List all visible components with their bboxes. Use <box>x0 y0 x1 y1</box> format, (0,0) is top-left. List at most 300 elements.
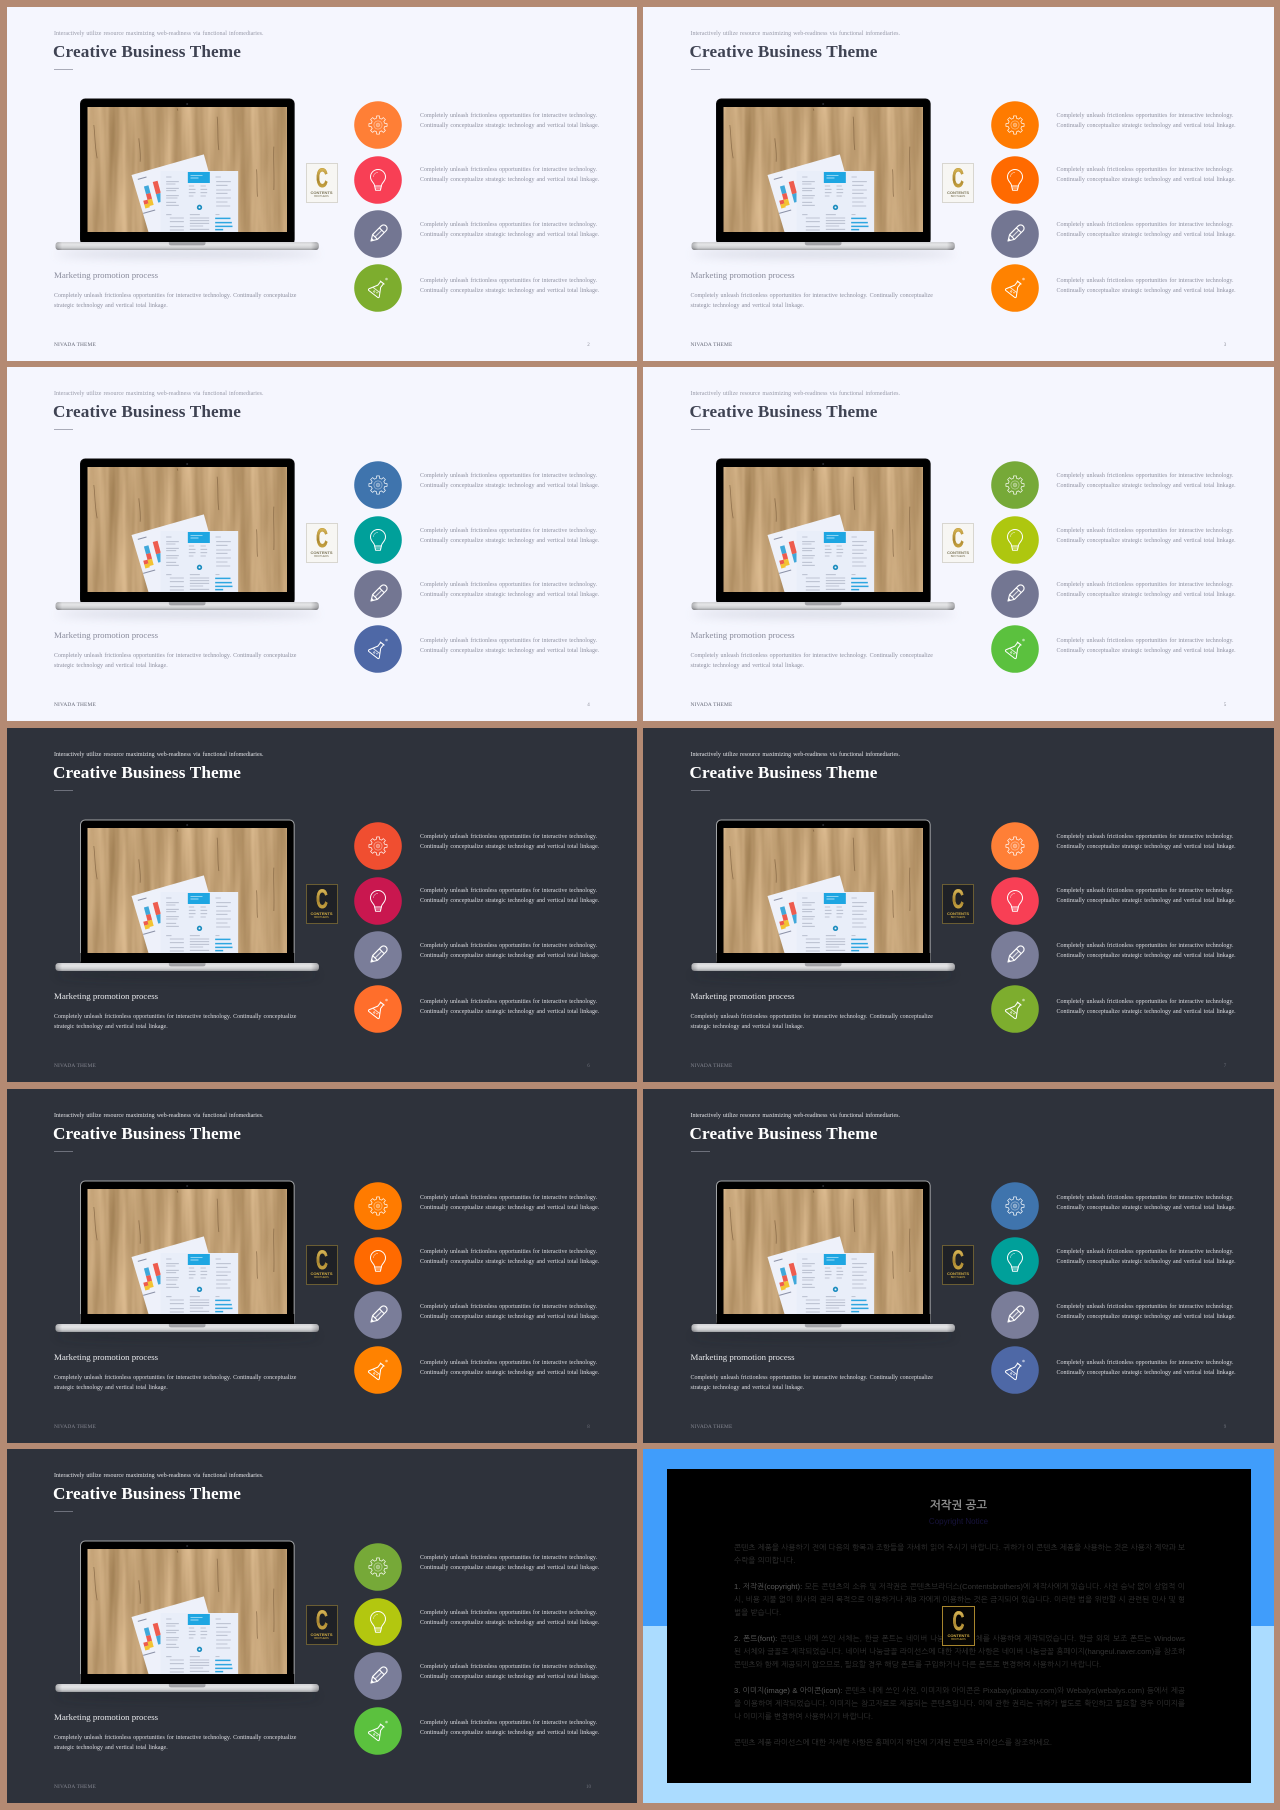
icon: pencil <box>991 210 1039 258</box>
logo: contents badge: BROTHERS <box>951 916 965 918</box>
icon: pencil <box>990 931 1038 979</box>
body text: strategic technology and vertical total linkage. <box>54 1745 168 1751</box>
icon: light bulb <box>354 1237 402 1285</box>
feature row 3 <box>354 1291 606 1339</box>
icon: flask <box>354 264 402 312</box>
feature text: Continually conceptualize strategic technology and vertical total linkage. <box>420 1730 599 1736</box>
heading: marketing promotion process: Marketing promotion process <box>690 1352 795 1362</box>
heading: marketing promotion process: Marketing promotion process <box>690 630 795 640</box>
body text: strategic technology and vertical total linkage. <box>54 1385 168 1391</box>
page number: 10 <box>586 1785 591 1790</box>
logo: contents badge: CONTENTS <box>947 1271 969 1276</box>
feature text <box>1056 1247 1236 1267</box>
page number: 2 <box>587 343 590 348</box>
feature text: Completely unleash frictionless opportunities for interactive technology. <box>420 1249 597 1255</box>
feature text <box>420 1718 599 1738</box>
logo: contents badge: BROTHERS <box>314 1276 329 1279</box>
notice subtitle: Copyright Notice <box>929 1517 988 1526</box>
feature row 2 <box>990 1237 1242 1285</box>
subtitle: Interactively utilize resource maximizing web-readiness via functional infomediaries. <box>54 31 263 37</box>
logo: contents badge <box>942 1245 974 1285</box>
feature text: Continually conceptualize strategic technology and vertical total linkage. <box>1056 953 1236 959</box>
feature text <box>420 528 599 544</box>
body text <box>54 1012 296 1032</box>
icon: flask <box>990 985 1038 1033</box>
logo: contents badge: C <box>952 163 964 193</box>
logo: contents badge: C <box>952 523 964 553</box>
title: Creative Business Theme <box>53 763 241 782</box>
feature text <box>1056 1193 1236 1213</box>
title underline <box>54 790 73 791</box>
body text <box>690 292 933 309</box>
body text <box>54 652 296 669</box>
feature text: Continually conceptualize strategic technology and vertical total linkage. <box>1056 648 1236 654</box>
logo: contents badge: CONTENTS <box>310 1632 332 1637</box>
title: Creative Business Theme <box>53 42 241 61</box>
feature text: Completely unleash frictionless opportunities for interactive technology. <box>1056 1249 1234 1255</box>
feature text: Continually conceptualize strategic technology and vertical total linkage. <box>1056 898 1236 904</box>
logo: contents badge: C <box>316 1245 327 1275</box>
logo: contents badge: C <box>316 523 327 553</box>
subtitle: Interactively utilize resource maximizing web-readiness via functional infomediaries. <box>54 391 263 397</box>
feature row 2 <box>354 1598 606 1646</box>
feature row 2 <box>990 877 1242 925</box>
feature row 1 <box>354 101 599 149</box>
feature text: Continually conceptualize strategic technology and vertical total linkage. <box>420 1370 599 1376</box>
feature text: Completely unleash frictionless opportunities for interactive technology. <box>420 1664 597 1670</box>
logo: contents badge <box>942 884 974 924</box>
icon: gear <box>990 1182 1038 1230</box>
feature text <box>1056 832 1236 852</box>
feature text <box>420 278 599 294</box>
heading: marketing promotion process: Marketing promotion process <box>54 991 158 1001</box>
feature text: Completely unleash frictionless opportunities for interactive technology. <box>1056 528 1234 534</box>
icon: pencil <box>354 931 402 979</box>
feature row 4 <box>354 625 599 673</box>
feature text <box>420 112 599 129</box>
feature text: Completely unleash frictionless opportunities for interactive technology. <box>1056 278 1234 284</box>
title: Creative Business Theme <box>690 402 878 421</box>
subtitle: Interactively utilize resource maximizing web-readiness via functional infomediaries. <box>690 31 900 37</box>
title underline <box>690 429 710 430</box>
icon: light bulb <box>354 516 402 564</box>
body text: Completely unleash frictionless opportunities for interactive technology. Continually conceptualize <box>54 293 296 299</box>
feature text <box>420 1553 599 1573</box>
title: Creative Business Theme <box>690 42 878 61</box>
feature text: Completely unleash frictionless opportunities for interactive technology. <box>1056 943 1234 949</box>
logo: contents badge: BROTHERS <box>314 194 329 198</box>
feature text <box>1056 1302 1236 1322</box>
logo: contents badge: CONTENTS <box>310 1271 332 1276</box>
feature text: Completely unleash frictionless opportunities for interactive technology. <box>420 1195 597 1201</box>
panel: dark slide 8 <box>643 1089 1274 1443</box>
feature row 1 <box>990 822 1242 870</box>
feature text: Completely unleash frictionless opportunities for interactive technology. <box>420 888 597 894</box>
feature text: Completely unleash frictionless opportunities for interactive technology. <box>420 222 597 228</box>
notice body text: 벌을 받습니다. <box>734 1608 781 1617</box>
feature text: Completely unleash frictionless opportunities for interactive technology. <box>1056 582 1234 588</box>
feature text: Continually conceptualize strategic technology and vertical total linkage. <box>1056 1009 1236 1015</box>
icon: flask <box>990 1346 1038 1394</box>
notice body text: 나 이미지를 변경하여 사용하시기 바랍니다. <box>734 1712 873 1721</box>
feature row 3 <box>990 570 1242 618</box>
page number: 9 <box>1224 1425 1226 1430</box>
feature text: Continually conceptualize strategic technology and vertical total linkage. <box>1056 483 1236 489</box>
feature text: Continually conceptualize strategic technology and vertical total linkage. <box>1056 177 1236 183</box>
feature row 1 <box>991 101 1236 149</box>
body text: strategic technology and vertical total linkage. <box>690 1024 804 1030</box>
feature text: Continually conceptualize strategic technology and vertical total linkage. <box>1056 232 1236 238</box>
feature text <box>1056 636 1236 656</box>
icon: flask <box>354 625 402 673</box>
feature text: Continually conceptualize strategic technology and vertical total linkage. <box>420 232 599 238</box>
notice body text <box>734 1541 1185 1749</box>
laptop mockup <box>46 1174 332 1354</box>
panel: light slide 3 <box>6 367 637 721</box>
logo: contents badge: C <box>316 1605 327 1635</box>
feature row 4 <box>354 1346 606 1394</box>
body text <box>54 292 296 309</box>
icon: pencil <box>990 1291 1038 1339</box>
icon: flask <box>354 1707 402 1755</box>
feature text: Continually conceptualize strategic technology and vertical total linkage. <box>420 1205 599 1211</box>
icon: light bulb <box>354 156 402 204</box>
feature row 2 <box>354 1237 606 1285</box>
feature text <box>1056 112 1236 129</box>
icon: gear <box>990 822 1038 870</box>
feature text: Completely unleash frictionless opportunities for interactive technology. <box>420 528 597 534</box>
feature row 2 <box>990 516 1242 564</box>
feature text: Completely unleash frictionless opportunities for interactive technology. <box>420 1304 597 1310</box>
icon: pencil <box>354 1291 402 1339</box>
laptop mockup <box>692 98 955 261</box>
feature text <box>420 222 599 238</box>
notice body text: 수락을 의미합니다. <box>734 1556 795 1565</box>
feature text: Continually conceptualize strategic technology and vertical total linkage. <box>420 288 599 294</box>
body text: strategic technology and vertical total linkage. <box>54 303 168 309</box>
page number: 5 <box>1224 703 1226 708</box>
feature text <box>420 941 599 961</box>
footer brand: NIVADA THEME <box>54 1063 96 1069</box>
footer brand: NIVADA THEME <box>54 1424 96 1430</box>
feature text <box>1056 471 1236 491</box>
logo: contents badge <box>306 1245 338 1285</box>
feature row 3 <box>990 931 1242 979</box>
body text: strategic technology and vertical total linkage. <box>690 663 804 669</box>
logo: contents badge <box>306 163 338 203</box>
icon: pencil <box>354 570 402 618</box>
logo: contents badge centered: CONTENTS <box>948 1633 970 1638</box>
footer brand: NIVADA THEME <box>54 1784 96 1790</box>
feature row 2 <box>354 877 606 925</box>
footer brand: NIVADA THEME <box>54 702 96 708</box>
feature text: Completely unleash frictionless opportunities for interactive technology. <box>1056 167 1234 173</box>
icon: flask <box>991 264 1039 312</box>
icon: flask <box>354 985 402 1033</box>
icon: flask <box>354 1346 402 1394</box>
feature row 1 <box>354 822 606 870</box>
feature text: Continually conceptualize strategic technology and vertical total linkage. <box>420 648 599 654</box>
laptop mockup <box>683 813 968 993</box>
feature text <box>1056 222 1236 238</box>
logo: contents badge: C <box>952 884 964 914</box>
laptop mockup <box>56 98 319 261</box>
feature text: Continually conceptualize strategic technology and vertical total linkage. <box>1056 1259 1236 1265</box>
icon: flask <box>990 625 1038 673</box>
title: Creative Business Theme <box>53 1484 241 1503</box>
icon: light bulb <box>354 877 402 925</box>
feature text: Continually conceptualize strategic technology and vertical total linkage. <box>420 123 599 129</box>
feature text: Completely unleash frictionless opportunities for interactive technology. <box>1056 1360 1234 1366</box>
subtitle: Interactively utilize resource maximizing web-readiness via functional infomediaries. <box>54 1113 263 1119</box>
feature text: Completely unleash frictionless opportunities for interactive technology. <box>420 999 597 1005</box>
feature row 3 <box>990 1291 1242 1339</box>
feature text <box>1056 166 1236 183</box>
laptop mockup <box>683 1174 968 1354</box>
logo: contents badge: BROTHERS <box>951 1276 965 1279</box>
feature text: Completely unleash frictionless opportunities for interactive technology. <box>420 834 597 840</box>
laptop mockup <box>46 813 332 993</box>
feature text <box>1056 941 1236 961</box>
feature row 4 <box>354 1707 606 1755</box>
logo: contents badge <box>306 884 338 924</box>
laptop mockup <box>56 458 319 621</box>
feature text: Continually conceptualize strategic technology and vertical total linkage. <box>420 592 599 598</box>
feature text: Continually conceptualize strategic technology and vertical total linkage. <box>1056 288 1236 294</box>
logo: contents badge: CONTENTS <box>310 550 332 555</box>
logo: contents badge: CONTENTS <box>947 910 969 916</box>
feature text: Completely unleash frictionless opportunities for interactive technology. <box>420 167 597 173</box>
panel: dark slide 6 <box>643 728 1274 1082</box>
feature text: Continually conceptualize strategic technology and vertical total linkage. <box>1056 844 1236 850</box>
feature text <box>1056 580 1236 600</box>
body text: Completely unleash frictionless opportunities for interactive technology. Continually conceptualize <box>54 1014 296 1020</box>
body text: strategic technology and vertical total linkage. <box>690 303 804 309</box>
title underline <box>54 1511 73 1512</box>
feature row 2 <box>354 156 599 204</box>
body text: strategic technology and vertical total linkage. <box>54 1024 168 1030</box>
subtitle: Interactively utilize resource maximizing web-readiness via functional infomediaries. <box>690 752 900 758</box>
logo: contents badge <box>942 523 974 563</box>
panel: dark slide 5 <box>6 728 637 1082</box>
feature text: Completely unleash frictionless opportunities for interactive technology. <box>420 582 597 588</box>
feature text: Continually conceptualize strategic technology and vertical total linkage. <box>420 1009 599 1015</box>
title: Creative Business Theme <box>690 763 878 782</box>
logo: contents badge centered: BROTHERS <box>951 1638 966 1641</box>
feature text <box>420 166 599 183</box>
logo: contents badge: CONTENTS <box>947 550 969 555</box>
feature text: Completely unleash frictionless opportunities for interactive technology. <box>1056 473 1234 479</box>
feature row 4 <box>990 625 1242 673</box>
feature row 1 <box>354 461 599 509</box>
feature text: Completely unleash frictionless opportunities for interactive technology. <box>1056 999 1234 1005</box>
icon: light bulb <box>991 156 1039 204</box>
title underline <box>690 790 710 791</box>
feature text <box>420 997 599 1017</box>
icon: gear <box>354 461 402 509</box>
feature text: Completely unleash frictionless opportunities for interactive technology. <box>420 473 597 479</box>
icon: gear <box>354 822 402 870</box>
body text: Completely unleash frictionless opportunities for interactive technology. Continually conceptualize <box>690 1014 933 1020</box>
panel: light slide 4 <box>643 367 1274 721</box>
feature text <box>420 1302 599 1322</box>
feature text: Continually conceptualize strategic technology and vertical total linkage. <box>1056 1370 1236 1376</box>
feature text: Completely unleash frictionless opportunities for interactive technology. <box>420 1720 597 1726</box>
feature row 4 <box>990 985 1242 1033</box>
footer brand: NIVADA THEME <box>690 342 732 348</box>
notice body text: 콘텐츠와 함께 제공되지 않으므로, 필요할 경우 해당 폰트를 구입하거나 다른 폰트로 변경하여 사용하시기 바랍니다. <box>734 1660 1101 1669</box>
body text <box>54 1373 296 1393</box>
footer brand: NIVADA THEME <box>690 1063 732 1069</box>
black notice card <box>666 1469 1250 1783</box>
page number: 8 <box>587 1425 590 1430</box>
feature row 1 <box>354 1543 606 1591</box>
logo: contents badge: CONTENTS <box>310 910 332 916</box>
page number: 4 <box>587 703 590 708</box>
body text: Completely unleash frictionless opportunities for interactive technology. Continually conceptualize <box>54 653 296 659</box>
logo: contents badge: BROTHERS <box>314 916 329 918</box>
title underline <box>54 69 73 70</box>
logo: contents badge <box>306 523 338 563</box>
feature text <box>1056 886 1236 906</box>
title underline <box>690 69 710 70</box>
panel: light slide 2 <box>643 7 1274 361</box>
feature text <box>420 636 599 656</box>
feature row 3 <box>354 570 599 618</box>
feature text: Completely unleash frictionless opportunities for interactive technology. <box>420 1360 597 1366</box>
logo: contents badge: BROTHERS <box>314 1637 329 1640</box>
title: Creative Business Theme <box>53 402 241 421</box>
feature row 2 <box>354 516 599 564</box>
footer brand: NIVADA THEME <box>54 342 96 348</box>
heading: marketing promotion process: Marketing promotion process <box>54 630 158 640</box>
icon: gear <box>354 1182 402 1230</box>
subtitle: Interactively utilize resource maximizing web-readiness via functional infomediaries. <box>690 391 900 397</box>
feature text <box>1056 1358 1236 1378</box>
icon: pencil <box>354 1652 402 1700</box>
feature row 1 <box>354 1182 606 1230</box>
heading: marketing promotion process: Marketing promotion process <box>54 1712 158 1722</box>
icon: gear <box>354 1543 402 1591</box>
icon: gear <box>354 101 402 149</box>
icon: light bulb <box>354 1598 402 1646</box>
feature text <box>420 1358 599 1378</box>
body text: strategic technology and vertical total linkage. <box>54 663 168 669</box>
logo: contents badge: CONTENTS <box>947 190 969 194</box>
footer brand: NIVADA THEME <box>690 1424 732 1430</box>
icon: light bulb <box>990 1237 1038 1285</box>
feature row 3 <box>991 210 1236 258</box>
feature text <box>420 1247 599 1267</box>
body text <box>54 1733 296 1753</box>
page number: 7 <box>1224 1064 1226 1069</box>
footer brand: NIVADA THEME <box>690 702 732 708</box>
heading: marketing promotion process: Marketing promotion process <box>690 991 795 1001</box>
feature text: Completely unleash frictionless opportunities for interactive technology. <box>420 943 597 949</box>
body text: Completely unleash frictionless opportunities for interactive technology. Continually conceptualize <box>690 293 933 299</box>
feature text: Continually conceptualize strategic technology and vertical total linkage. <box>1056 592 1236 598</box>
panel: dark slide 7 <box>6 1089 637 1443</box>
panel: dark slide 9 <box>6 1449 637 1803</box>
feature text: Completely unleash frictionless opportunities for interactive technology. <box>420 1610 597 1616</box>
feature text: Continually conceptualize strategic technology and vertical total linkage. <box>420 1565 599 1571</box>
icon: gear <box>990 461 1038 509</box>
feature text: Completely unleash frictionless opportunities for interactive technology. <box>420 278 597 284</box>
logo: contents badge centered <box>942 1606 975 1646</box>
icon: pencil <box>990 570 1038 618</box>
feature text: Continually conceptualize strategic technology and vertical total linkage. <box>420 1314 599 1320</box>
feature row 1 <box>990 461 1242 509</box>
feature text: Continually conceptualize strategic technology and vertical total linkage. <box>420 898 599 904</box>
icon: light bulb <box>990 516 1038 564</box>
feature text <box>420 886 599 906</box>
icon: pencil <box>354 210 402 258</box>
title: Creative Business Theme <box>690 1124 878 1143</box>
body text: Completely unleash frictionless opportunities for interactive technology. Continually conceptualize <box>54 1735 296 1741</box>
logo: contents badge <box>942 163 974 203</box>
feature text: Continually conceptualize strategic technology and vertical total linkage. <box>420 177 599 183</box>
logo: contents badge: BROTHERS <box>314 555 329 558</box>
icon: light bulb <box>990 877 1038 925</box>
feature text <box>1056 526 1236 546</box>
feature text: Continually conceptualize strategic technology and vertical total linkage. <box>420 1674 599 1680</box>
laptop mockup <box>683 452 968 632</box>
panel: copyright notice <box>643 1449 1274 1803</box>
notice body text: 콘텐츠 제품 라이선스에 대한 자세한 사항은 홈페이지 하단에 기재된 콘텐츠 라이선스를 참조하세요. <box>734 1738 1052 1747</box>
feature text <box>420 1662 599 1682</box>
feature row 3 <box>354 1652 606 1700</box>
heading: marketing promotion process: Marketing promotion process <box>690 270 795 280</box>
page number: 6 <box>587 1064 590 1069</box>
body text: strategic technology and vertical total linkage. <box>690 1385 804 1391</box>
feature text: Completely unleash frictionless opportunities for interactive technology. <box>420 113 597 119</box>
subtitle: Interactively utilize resource maximizing web-readiness via functional infomediaries. <box>690 1113 900 1119</box>
notice title: 저작권 공고 <box>930 1500 987 1512</box>
panel: light slide 1 <box>6 7 637 361</box>
feature row 4 <box>354 264 599 312</box>
feature text: Completely unleash frictionless opportunities for interactive technology. <box>1056 113 1234 119</box>
feature text: Completely unleash frictionless opportunities for interactive technology. <box>1056 222 1234 228</box>
logo: contents badge: BROTHERS <box>951 555 965 558</box>
feature text: Completely unleash frictionless opportunities for interactive technology. <box>420 1555 597 1561</box>
feature text <box>420 472 599 489</box>
feature row 3 <box>354 210 599 258</box>
logo: contents badge: C <box>316 884 327 914</box>
body text: Completely unleash frictionless opportunities for interactive technology. Continually conceptualize <box>54 1375 296 1381</box>
logo: contents badge: BROTHERS <box>951 194 965 198</box>
logo: contents badge: CONTENTS <box>310 190 332 194</box>
feature text: Continually conceptualize strategic technology and vertical total linkage. <box>420 538 599 544</box>
body text <box>690 651 933 671</box>
subtitle: Interactively utilize resource maximizing web-readiness via functional infomediaries. <box>54 1473 263 1479</box>
feature text: Continually conceptualize strategic technology and vertical total linkage. <box>1056 1205 1236 1211</box>
feature row 4 <box>354 985 606 1033</box>
body text: Completely unleash frictionless opportunities for interactive technology. Continually conceptualize <box>690 1375 933 1381</box>
title underline <box>54 429 73 430</box>
feature text <box>1056 997 1236 1017</box>
title underline <box>54 1151 73 1152</box>
feature row 3 <box>354 931 606 979</box>
feature text: Continually conceptualize strategic technology and vertical total linkage. <box>420 1259 599 1265</box>
feature text <box>420 832 599 852</box>
feature text <box>420 582 599 598</box>
page number: 3 <box>1224 343 1226 348</box>
feature text: Continually conceptualize strategic technology and vertical total linkage. <box>420 844 599 850</box>
feature text: Continually conceptualize strategic technology and vertical total linkage. <box>1056 1314 1236 1320</box>
feature text <box>420 1193 599 1213</box>
feature text: Completely unleash frictionless opportunities for interactive technology. <box>1056 834 1234 840</box>
logo: contents badge: C <box>316 163 327 193</box>
